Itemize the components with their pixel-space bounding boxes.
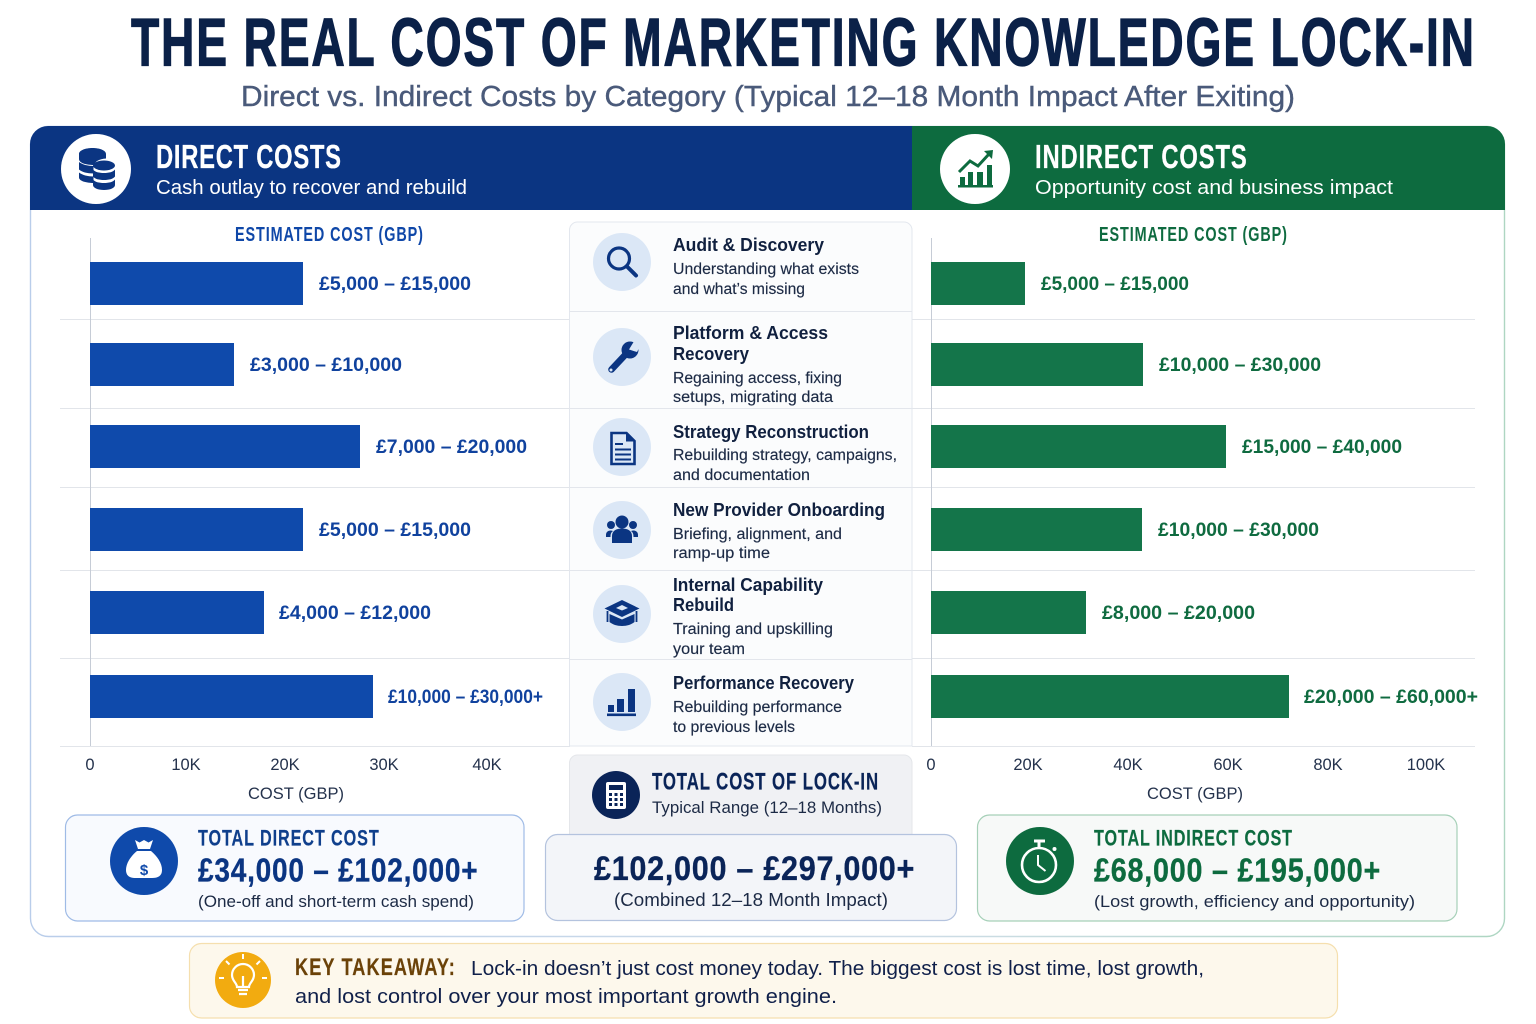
key takeaway callout: and lost control over your most important growth engine. xyxy=(295,986,837,1008)
category: strategy reconstruction: and documentation xyxy=(673,467,810,484)
axis labels: indirect: 40K xyxy=(1113,756,1143,774)
bar: strategy indirect: £15,000 – £40,000 xyxy=(1242,436,1402,458)
subtitle: Direct vs. Indirect Costs by Category (Typical 12–18 Month Impact After Exiting) xyxy=(241,81,1295,113)
category: strategy reconstruction: Strategy Reconstruction xyxy=(673,422,869,442)
category: internal capability rebuild: Rebuild xyxy=(673,595,734,615)
category: performance recovery: Rebuilding performance xyxy=(673,699,842,716)
category: audit and discovery xyxy=(593,233,859,298)
heading: direct costs: DIRECT COSTS xyxy=(156,139,341,176)
axis labels: direct: 30K xyxy=(369,756,399,774)
bar: strategy indirect xyxy=(931,425,1402,468)
bar: platform direct xyxy=(90,343,402,386)
total direct cost: TOTAL DIRECT COST xyxy=(198,826,379,851)
category: new provider onboarding: Briefing, alignment, and xyxy=(673,526,842,543)
grid lines xyxy=(60,320,1475,746)
icon: growth chart xyxy=(940,134,1010,204)
icon: money bag: $ xyxy=(140,862,149,879)
bar: audit indirect xyxy=(931,262,1189,305)
category: platform and access recovery: Regaining access, fixing xyxy=(673,370,842,387)
total direct cost xyxy=(66,815,524,921)
text: direct costs description: Cash outlay to recover and rebuild xyxy=(156,177,467,199)
chart: direct costs bars xyxy=(85,223,543,803)
bar: strategy direct xyxy=(90,425,527,468)
category: internal capability rebuild: your team xyxy=(673,641,745,658)
total cost value xyxy=(546,834,956,920)
bar: platform indirect: £10,000 – £30,000 xyxy=(1159,354,1321,376)
bar: platform direct: £3,000 – £10,000 xyxy=(250,354,402,376)
axis labels: indirect: 20K xyxy=(1013,756,1043,774)
icon: database coins xyxy=(61,134,131,204)
category: platform and access recovery: Platform & Access xyxy=(673,323,828,343)
icon: wrench xyxy=(593,328,651,386)
axis labels: indirect: 100K xyxy=(1407,756,1445,774)
icon: calculator xyxy=(592,771,640,819)
bar: onboarding indirect: £10,000 – £30,000 xyxy=(1158,519,1319,541)
key takeaway callout: Lock-in doesn’t just cost money today. The biggest cost is lost time, lost growth, xyxy=(471,958,1204,980)
bar: audit indirect: £5,000 – £15,000 xyxy=(1041,273,1189,295)
category: audit and discovery: Audit & Discovery xyxy=(673,235,824,255)
axis labels: direct: 20K xyxy=(270,756,300,774)
category: audit and discovery: Understanding what exists xyxy=(673,261,859,278)
icon: stopwatch xyxy=(1006,827,1074,895)
category: platform and access recovery xyxy=(593,323,842,406)
category: internal capability rebuild xyxy=(593,575,833,658)
axis labels: indirect xyxy=(926,756,1445,803)
category: new provider onboarding: New Provider Onboarding xyxy=(673,500,885,520)
category: new provider onboarding: ramp-up time xyxy=(673,545,770,562)
bar: audit direct xyxy=(90,262,471,305)
category: performance recovery: Performance Recovery xyxy=(673,673,854,693)
total indirect cost: (Lost growth, efficiency and opportunity) xyxy=(1094,892,1415,911)
total direct cost: £34,000 – £102,000+ xyxy=(198,852,478,889)
total direct cost: (One-off and short-term cash spend) xyxy=(198,892,474,911)
bar: performance direct xyxy=(90,675,543,718)
icon: magnifier xyxy=(593,233,651,291)
bar: capability direct xyxy=(90,591,431,634)
panel: indirect costs header xyxy=(912,126,1505,210)
total cost header: TOTAL COST OF LOCK-IN xyxy=(652,769,878,795)
category: strategy reconstruction: Rebuilding strategy, campaigns, xyxy=(673,447,897,464)
key takeaway callout xyxy=(190,944,1338,1018)
bar: performance indirect: £20,000 – £60,000+ xyxy=(1304,686,1478,708)
category: strategy reconstruction xyxy=(593,418,897,484)
bar: audit direct: £5,000 – £15,000 xyxy=(319,273,471,295)
heading: indirect costs: INDIRECT COSTS xyxy=(1035,139,1247,176)
category: platform and access recovery: Recovery xyxy=(673,344,749,364)
axis labels: direct: COST (GBP) xyxy=(248,785,344,803)
axis labels: direct: 10K xyxy=(171,756,201,774)
category: platform and access recovery: setups, migrating data xyxy=(673,389,833,406)
total cost value: (Combined 12–18 Month Impact) xyxy=(614,890,888,910)
total cost value: £102,000 – £297,000+ xyxy=(594,850,914,887)
axis labels: indirect: 80K xyxy=(1313,756,1343,774)
bar: onboarding indirect xyxy=(931,508,1319,551)
category: performance recovery xyxy=(593,673,854,736)
total indirect cost xyxy=(978,815,1457,921)
category: internal capability rebuild: Training and upskilling xyxy=(673,621,833,638)
icon: bar chart xyxy=(593,673,651,731)
text: indirect costs description: Opportunity cost and business impact xyxy=(1035,177,1393,199)
bar: onboarding direct: £5,000 – £15,000 xyxy=(319,519,471,541)
axis labels: indirect: 0 xyxy=(926,756,936,774)
icon: graduation cap xyxy=(593,585,651,643)
title: THE REAL COST OF MARKETING KNOWLEDGE LOCK-IN xyxy=(131,5,1474,81)
category: audit and discovery: and what’s missing xyxy=(673,281,805,298)
chart title: direct: ESTIMATED COST (GBP) xyxy=(235,223,423,246)
bar: capability indirect xyxy=(931,591,1255,634)
icon: document xyxy=(593,418,651,476)
bar: performance indirect xyxy=(931,675,1478,718)
category: internal capability rebuild: Internal Capability xyxy=(673,575,823,595)
axis labels: direct: 0 xyxy=(85,756,95,774)
axis labels: indirect: 60K xyxy=(1213,756,1243,774)
total indirect cost: £68,000 – £195,000+ xyxy=(1094,852,1380,889)
bar: strategy direct: £7,000 – £20,000 xyxy=(376,436,527,458)
bar: onboarding direct xyxy=(90,508,471,551)
bar: performance direct: £10,000 – £30,000+ xyxy=(388,686,543,708)
icon: people xyxy=(593,501,651,559)
icon: light bulb xyxy=(215,952,271,1008)
axis labels: direct: 40K xyxy=(472,756,502,774)
panel: categories xyxy=(569,222,912,746)
bar: capability direct: £4,000 – £12,000 xyxy=(279,602,431,624)
bar: capability indirect: £8,000 – £20,000 xyxy=(1102,602,1255,624)
axis labels: indirect: COST (GBP) xyxy=(1147,785,1243,803)
axis labels: direct xyxy=(85,756,502,803)
category: performance recovery: to previous levels xyxy=(673,719,795,736)
total cost header: Typical Range (12–18 Months) xyxy=(652,798,882,817)
total indirect cost: TOTAL INDIRECT COST xyxy=(1094,826,1292,851)
bar: platform indirect xyxy=(931,343,1321,386)
chart title: indirect: ESTIMATED COST (GBP) xyxy=(1099,223,1287,246)
panel: direct costs header xyxy=(30,126,912,210)
category: new provider onboarding xyxy=(593,500,885,562)
total cost header xyxy=(570,755,912,835)
key takeaway callout: KEY TAKEAWAY: xyxy=(295,952,455,981)
main panel frame xyxy=(30,126,1504,936)
icon: money bag xyxy=(110,827,178,895)
chart: indirect costs bars xyxy=(926,223,1478,803)
